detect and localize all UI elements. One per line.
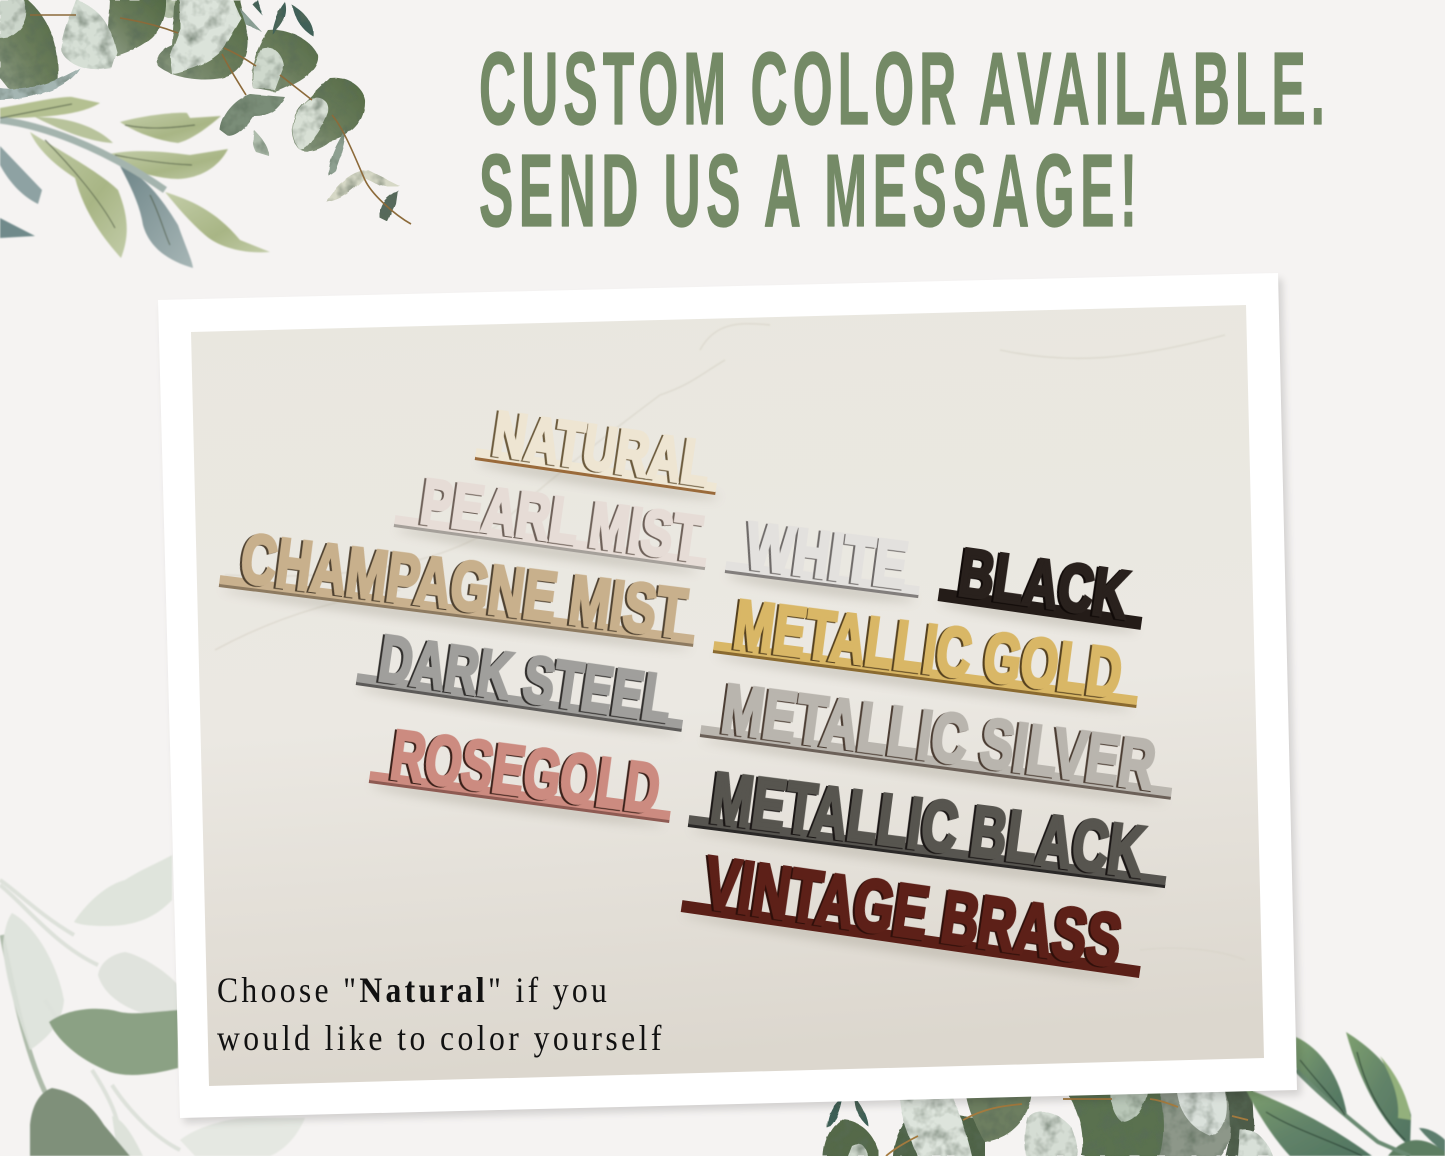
sample: NATURAL: NATURAL: [489, 399, 715, 500]
sample: CHAMPAGNE MIST: [218, 517, 702, 656]
sample: ROSEGOLD: ROSEGOLD: [387, 715, 665, 828]
sample: DARK STEEL: DARK STEEL: [375, 621, 676, 736]
note: choose natural: Choose "Natural" if you: [217, 971, 607, 1010]
sample: CHAMPAGNE MIST: CHAMPAGNE MIST: [237, 519, 691, 652]
note: choose natural: [217, 971, 662, 1058]
title: [479, 32, 1325, 249]
sample: VINTAGE BRASS: [679, 838, 1150, 987]
sample: NATURAL: [473, 397, 728, 505]
sample: METALLIC GOLD: [712, 583, 1145, 717]
photo of sample name signs on marble: [191, 305, 1264, 1086]
sample: BLACK: BLACK: [955, 534, 1134, 633]
marble veins: [215, 324, 1245, 960]
title: SEND US A MESSAGE!: [479, 134, 1137, 249]
sample: METALLIC BLACK: [687, 756, 1174, 897]
sample: BLACK: [936, 532, 1150, 638]
sample: PEARL MIST: [392, 462, 714, 579]
polaroid card shadow: [162, 279, 1301, 1123]
note: choose natural: would like to color yourself: [217, 1019, 662, 1058]
sample: ROSEGOLD: [368, 713, 678, 832]
sample: METALLIC BLACK: METALLIC BLACK: [707, 758, 1149, 893]
polaroid card: [158, 273, 1297, 1118]
sample: METALLIC SILVER: [699, 667, 1180, 809]
foliage: bottom-left pale leaves: [0, 855, 305, 1156]
sample: DARK STEEL: [354, 618, 691, 741]
title: CUSTOM COLOR AVAILABLE.: [479, 32, 1325, 147]
foliage: top-left eucalyptus and olive leaves: [0, 0, 411, 268]
sample: WHITE: WHITE: [742, 508, 912, 602]
sample: METALLIC SILVER: METALLIC SILVER: [718, 669, 1160, 804]
sample: METALLIC GOLD: METALLIC GOLD: [730, 585, 1126, 712]
sample: PEARL MIST: PEARL MIST: [417, 465, 706, 575]
sample: VINTAGE BRASS: VINTAGE BRASS: [699, 841, 1127, 983]
foliage: bottom-right eucalyptus and green leaves: [823, 1032, 1445, 1156]
